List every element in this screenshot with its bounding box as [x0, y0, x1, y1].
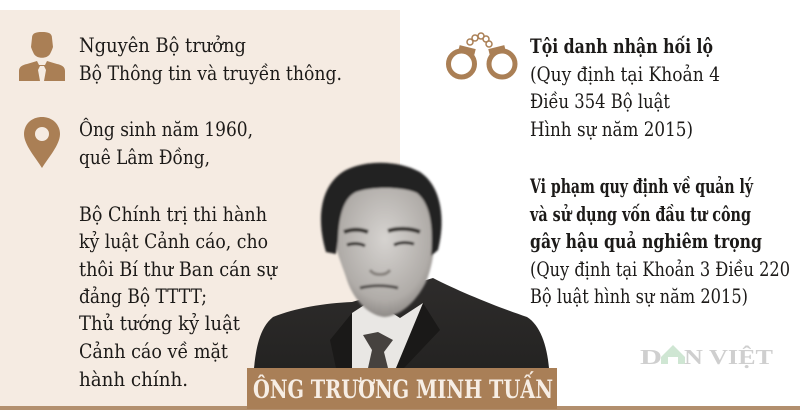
- text: charge one: Tội danh nhận hối lộ: [530, 34, 713, 58]
- text: disciplinary actions: hành chính.: [79, 367, 188, 391]
- text: disciplinary actions: [79, 202, 278, 391]
- text: disciplinary actions: kỷ luật Cảnh cáo, cho: [79, 229, 268, 253]
- text: position: Nguyên Bộ trưởng: [79, 33, 246, 57]
- text: disciplinary actions: thôi Bí thư Ban cán sự: [79, 257, 278, 281]
- name banner: [247, 368, 557, 409]
- watermark: Dân Việt logo: N VIỆT: [684, 345, 773, 369]
- text: charge one: Điều 354 Bộ luật: [530, 89, 670, 113]
- panel: biography background: [0, 10, 400, 407]
- text: birth and hometown: [79, 116, 253, 169]
- portrait: man in dark suit: [254, 163, 549, 368]
- watermark: Dân Việt logo: D: [640, 345, 662, 369]
- text: birth and hometown: quê Lâm Đồng,: [79, 145, 210, 169]
- text: charge two: Bộ luật hình sự năm 2015): [530, 284, 748, 308]
- icon: location pin: [24, 117, 60, 168]
- watermark: Dân Việt logo: [640, 345, 773, 369]
- text: charge one: [530, 34, 720, 141]
- text: position: [79, 33, 342, 85]
- text: charge two: [529, 174, 790, 308]
- text: disciplinary actions: Thủ tướng kỷ luật: [79, 311, 240, 335]
- text: disciplinary actions: Bộ Chính trị thi hành: [79, 202, 267, 226]
- icon: person in suit: [19, 32, 65, 81]
- text: charge one: Hình sự năm 2015): [530, 117, 693, 141]
- text: birth and hometown: Ông sinh năm 1960,: [79, 116, 253, 141]
- bottom rule: [0, 406, 800, 410]
- text: disciplinary actions: đảng Bộ TTTT;: [79, 284, 207, 308]
- icon: handcuffs: [448, 33, 515, 77]
- text: position: Bộ Thông tin và truyền thông.: [79, 61, 342, 85]
- text: charge one: (Quy định tại Khoản 4: [530, 62, 720, 86]
- name banner: ÔNG TRƯƠNG MINH TUẤN: [253, 372, 553, 404]
- text: disciplinary actions: Cảnh cáo về mặt: [79, 339, 228, 363]
